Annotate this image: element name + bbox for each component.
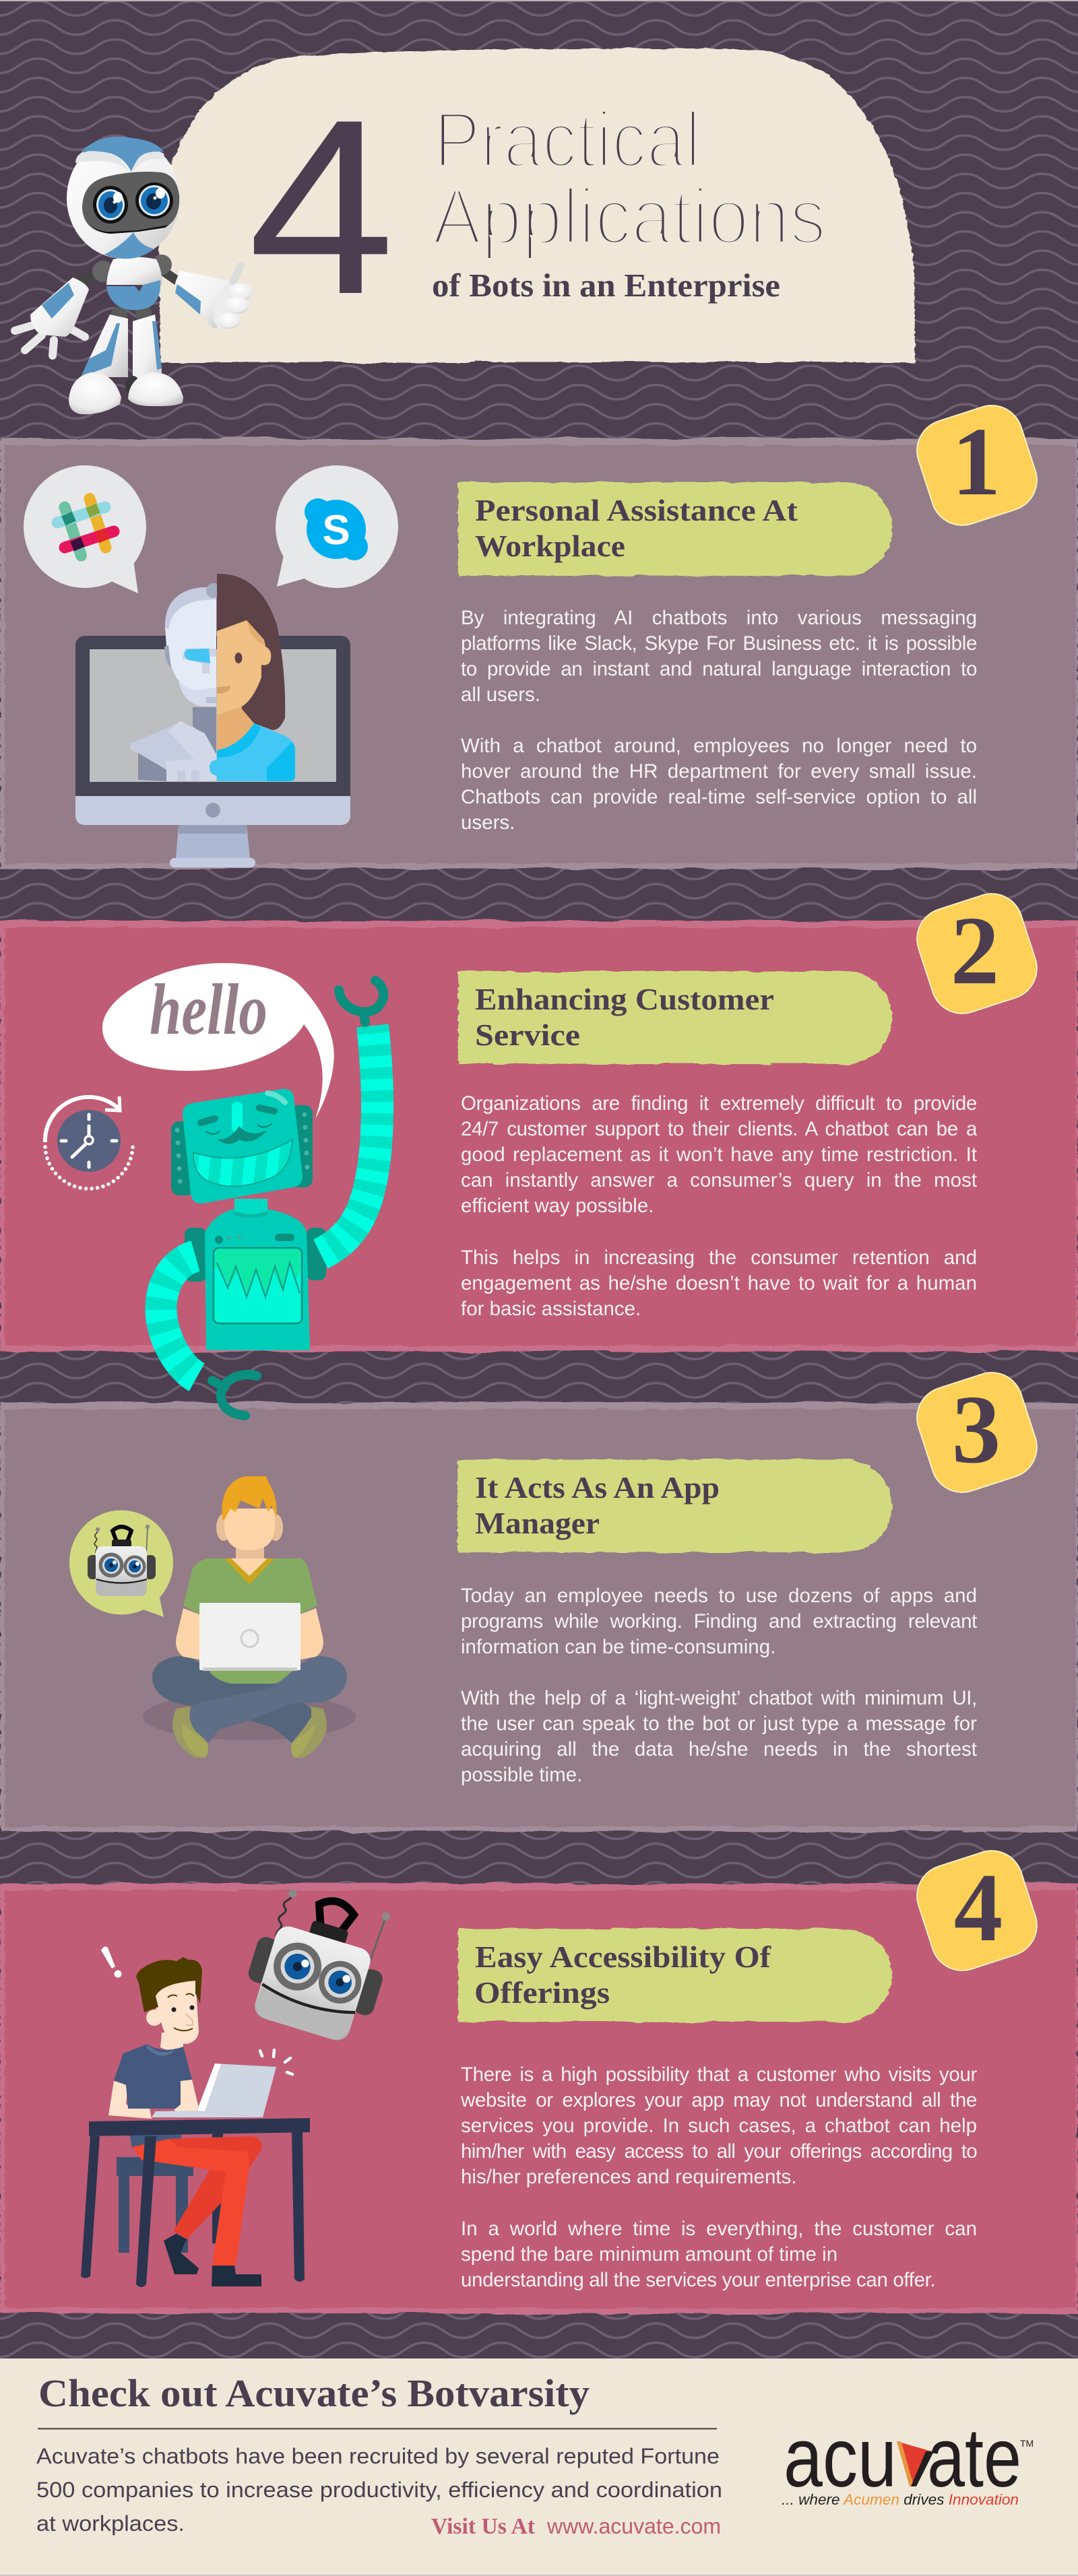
neck [160,2033,183,2051]
title pill 2: Enhancing Customer [475,982,774,1016]
illustration: clock icon [45,1096,133,1189]
badge 3 [909,1364,1045,1500]
body text 4: There is a high possibility that a customer who visits your [461,2063,977,2086]
title: Applications: Applications [433,172,826,261]
body text 3: information can be time-consuming. [461,1636,775,1658]
body text 3: the user can speak to the bot or just type a message for [461,1713,977,1735]
body text 3: possible time. [461,1764,582,1786]
badge 1 [909,397,1045,533]
body text 1: With a chatbot around, employees no longer need to [461,735,977,757]
title pill 3 [457,1459,892,1552]
illustration: bot speech bubble [69,1510,173,1617]
body text 2: engagement as he/she doesn’t have to wait for a human [461,1272,977,1294]
laptop [199,1603,300,1670]
raised claw [339,981,383,1022]
title pill 4: Offerings [474,1975,610,2010]
badge 1: 1 [952,408,1001,516]
footer heading: Check out Acuvate’s Botvarsity [38,2371,590,2415]
body text 2: 24/7 customer support to their clients. A chatbot can be a [461,1118,977,1140]
arm back [108,2081,152,2119]
robot legs and feet [69,305,183,414]
visit us link [431,2514,721,2539]
chair [119,2172,188,2253]
panel 1: personal assistance [0,397,1078,869]
head [216,1514,231,1541]
robot arms [15,255,253,356]
acuvate logo: ... where Acumen drives Innovation [782,2491,1019,2508]
panel 1 background [0,438,1078,869]
header banner [159,48,915,362]
body text 4: spend the bare minimum amount of time in [461,2243,837,2266]
body text 2: This helps in increasing the consumer retention and [461,1247,977,1269]
lowered arm [161,1256,197,1377]
badge 4: 4 [954,1854,1003,1962]
acuvate logo: ate [927,2412,1021,2505]
body text 1: all users. [461,684,540,706]
visit us link: Visit Us At [431,2514,536,2539]
body text 2: efficient way possible. [461,1195,654,1217]
arm front [174,2080,199,2115]
title pill 2 [458,971,892,1064]
badge 2 [909,886,1045,1022]
title pill 4: Easy Accessibility Of [475,1940,771,1974]
robot half [193,707,216,754]
body text 1: By integrating AI chatbots into various messaging [461,607,977,629]
neck and torso [236,1542,264,1576]
shoulders [185,1228,206,1282]
body text 3: programs while working. Finding and extracting relevant [461,1610,977,1632]
body text 3: Today an employee needs to use dozens of apps and [461,1585,977,1607]
shirt [114,2044,192,2109]
dark pant leg [152,1656,311,1743]
illustration: teal robot [161,981,383,1416]
illustration: slack speech bubble [24,465,146,593]
numeral 4: 4 [248,68,395,346]
panel 2: customer service [0,886,1078,1416]
badge 2: 2 [951,897,999,1005]
panel 4: accessibility [0,1843,1078,2313]
title pill 2: Service [475,1018,580,1052]
shoes [172,1707,208,1758]
title pill 4 [458,1929,892,2022]
badge 4 [909,1843,1045,1979]
banner shape [159,48,915,362]
body text 4: understanding all the services your enterprise can offer. [461,2269,935,2291]
back table leg [212,2132,223,2243]
exclamation mark [101,1946,115,1969]
body text 4: him/her with easy access to all your offerings according to [461,2140,977,2162]
footer background [0,2358,1078,2576]
head [156,1981,199,2044]
body text 3: With the help of a ‘light-weight’ chatbot with minimum UI, [461,1687,977,1709]
title pill 1: Workplace [475,529,625,563]
illustration: half robot half woman [130,574,295,781]
table [89,2118,310,2136]
footer body text: 500 companies to increase productivity, efficiency and coordination [36,2478,722,2502]
illustration: man at desk [81,1946,310,2287]
title pill 1 [458,482,892,576]
title pill 3: It Acts As An App [475,1470,720,1505]
subtitle: of Bots in an Enterprise [432,267,780,304]
hello lettering: hello [150,970,267,1050]
laptop [197,2063,276,2117]
torso [205,1209,310,1350]
body text 4 [461,2062,977,2298]
robot head [67,137,180,259]
ears [171,1121,194,1195]
illustration: skype speech bubble: S [322,507,350,554]
body text 2: good replacement as it won’t have any time restriction. It [461,1144,977,1166]
footer body text: Acuvate’s chatbots have been recruited by several reputed Fortune [36,2444,720,2468]
panel 4 background [0,1884,1078,2313]
title pill 1: Personal Assistance At [475,493,798,527]
body text 4: his/her preferences and requirements. [461,2166,796,2188]
body text 1: to provide an instant and natural language interaction to [461,658,977,680]
body text 3: acquiring all the data he/she needs in the shortest [461,1738,977,1760]
illustration: hello speech bubble [102,963,334,1119]
badge 3: 3 [952,1376,1001,1484]
arms [176,1608,202,1660]
illustration: person with laptop [143,1476,356,1758]
visit us link: www.acuvate.com [546,2514,721,2538]
hair [217,574,285,730]
body text 2: can instantly answer a consumer’s query in the most [461,1169,977,1191]
sparkles [260,2050,292,2074]
shoes [164,2234,199,2274]
body text 1: users. [461,812,515,834]
head [183,1089,303,1203]
robot torso [106,257,162,310]
title pill 3: Manager [475,1506,600,1540]
body text 1 [461,605,977,841]
body text 1: Chatbots can provide real-time self-service option to all [461,786,977,808]
body text 2: Organizations are finding it extremely difficult to provide [461,1092,977,1115]
title: Practical: Practical [434,96,701,185]
acuvate logo: TM [1020,2438,1034,2449]
body text 4: services you provide. In such cases, a chatbot can help [461,2115,977,2137]
body text 3 [461,1583,977,1799]
trousers [173,2169,227,2239]
light pant leg [189,1656,347,1743]
footer body text [36,2444,722,2536]
illustration: monitor [75,636,350,867]
smile [193,1140,292,1187]
shirt lower [129,2132,182,2148]
lowered claw [212,1375,257,1416]
neck [234,1199,267,1215]
footer [0,2358,1078,2576]
panel 2 background [0,921,1078,1352]
acuvate logo: acu [784,2412,897,2505]
body text 4: website or explores your app may not understand all the [461,2089,977,2111]
body text 2: for basic assistance. [461,1298,641,1320]
shirt [217,723,295,781]
skin [217,620,271,715]
body text 2 [461,1091,977,1327]
acuvate logo [782,2412,1034,2508]
panel 3 background [0,1402,1078,1832]
body text 4: In a world where time is everything, the customer can [461,2218,977,2240]
illustration: skype speech bubble [276,465,398,588]
body text 1: hover around the HR department for every small issue. [461,760,977,783]
robot mascot [15,137,253,414]
illustration: floating bot head [236,1879,402,2049]
body text 1: platforms like Slack, Skype For Business etc. it is possible [461,632,977,655]
footer body text: at workplaces. [36,2511,185,2536]
chest screen [214,1248,302,1323]
raised arm [321,1026,377,1254]
panel 3: app manager [0,1364,1078,1832]
